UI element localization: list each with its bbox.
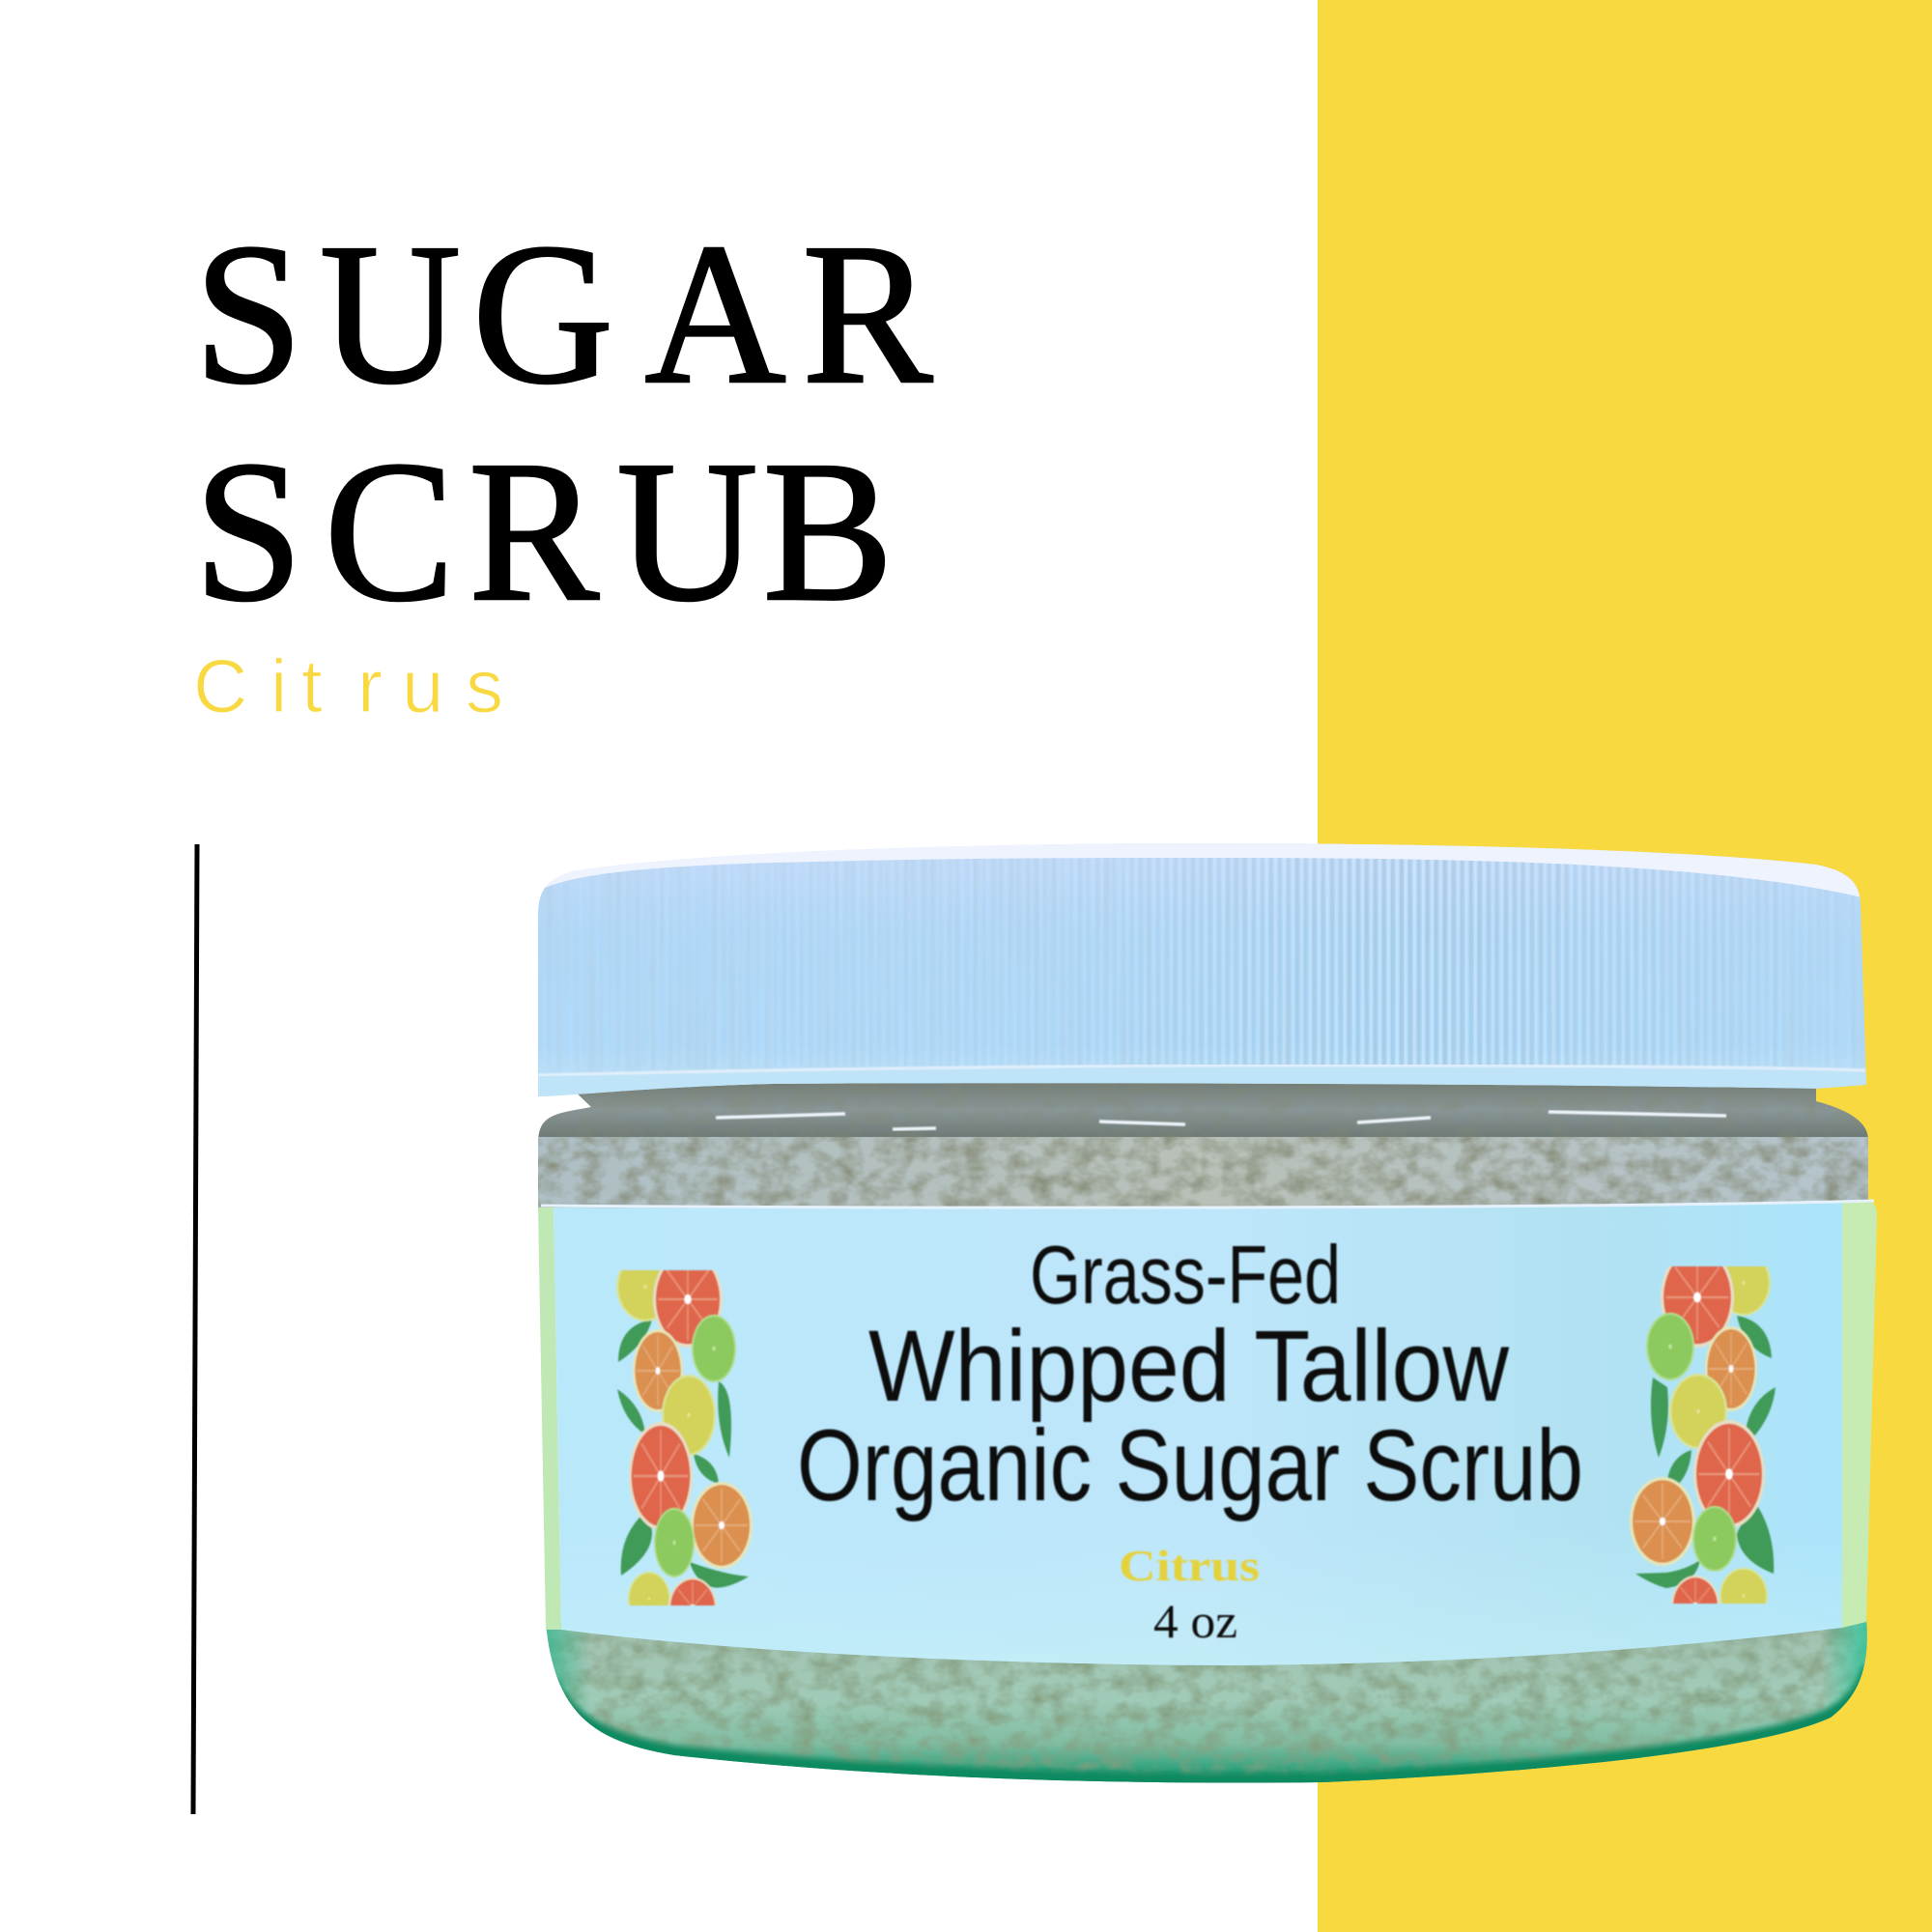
label art: left citrus column [615,1269,753,1606]
label line: Organic Sugar Scrub: Organic Sugar Scrub [797,1409,1583,1522]
jar neck [538,1083,1868,1137]
label text [797,1230,1583,1648]
panel: yellow block [1318,0,1932,1932]
vertical divider line [193,844,197,1814]
label side stripes [538,1201,1877,1630]
title: Sugar Scrub [194,202,933,643]
jar bottom sugar [538,1613,1876,1787]
label line: 4 oz: 4 oz [1153,1594,1237,1648]
jar lid [522,831,1884,1098]
label [541,1201,1874,1665]
label art: right citrus column [1629,1265,1776,1605]
heading line: SCRUB: SCRUB [194,419,894,643]
sugar visible above label [538,1137,1868,1208]
product jar [522,831,1884,1787]
label line: Whipped Tallow: Whipped Tallow [868,1310,1510,1423]
heading line: SUGAR: SUGAR [194,202,933,426]
subtitle: Citrus: Citrus [193,643,503,728]
label line: Grass-Fed: Grass-Fed [1030,1230,1341,1321]
label line: Citrus: Citrus [1119,1541,1260,1590]
